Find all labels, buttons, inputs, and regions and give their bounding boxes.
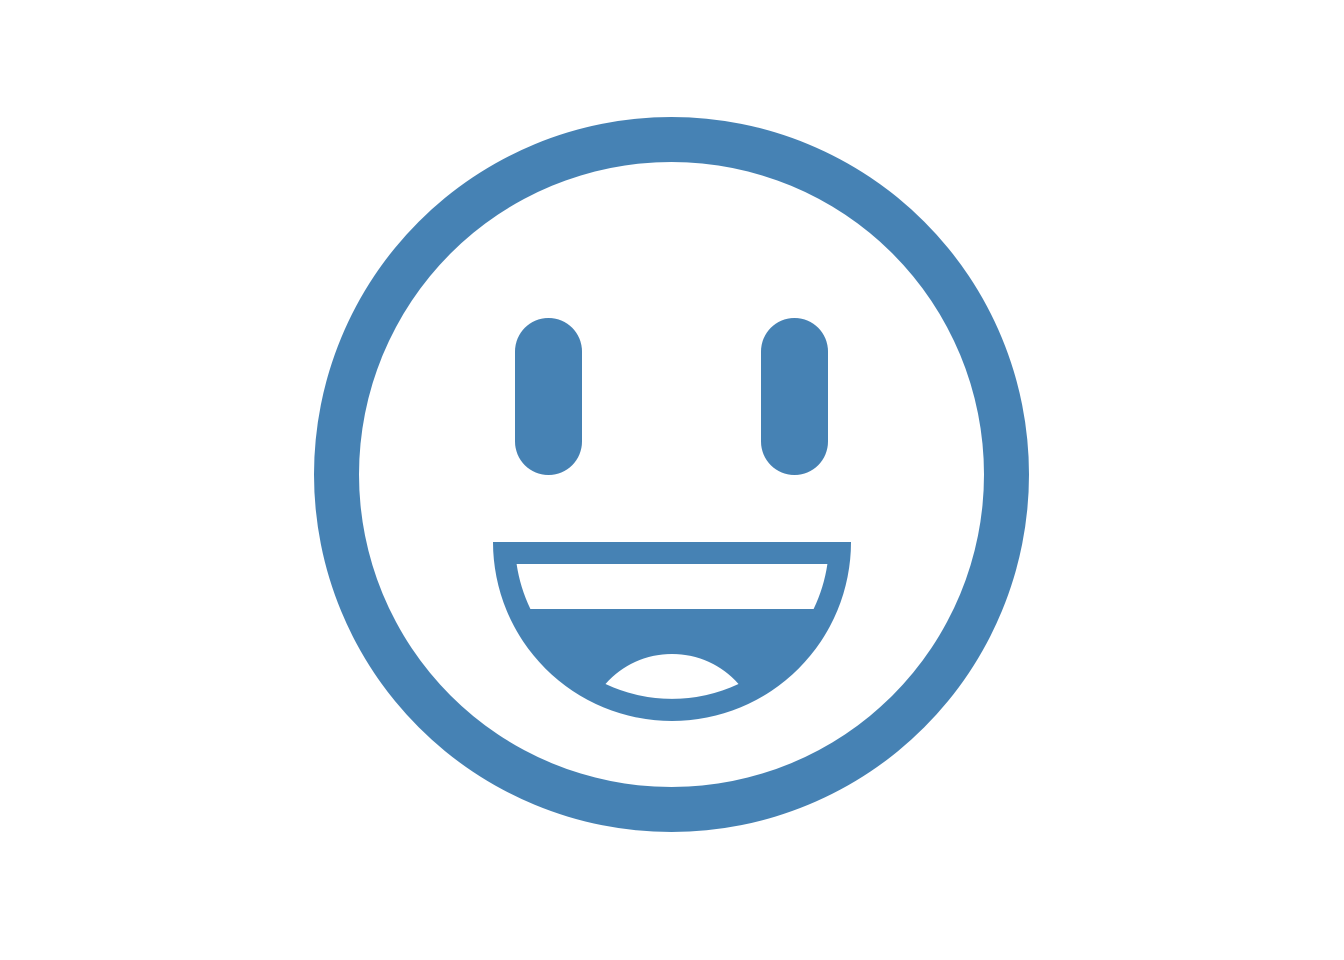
right eye <box>761 318 828 475</box>
left eye <box>515 318 582 475</box>
open mouth with teeth and tongue <box>493 542 851 721</box>
face outline ring <box>314 117 1029 832</box>
icon: smiling face <box>314 117 1029 832</box>
